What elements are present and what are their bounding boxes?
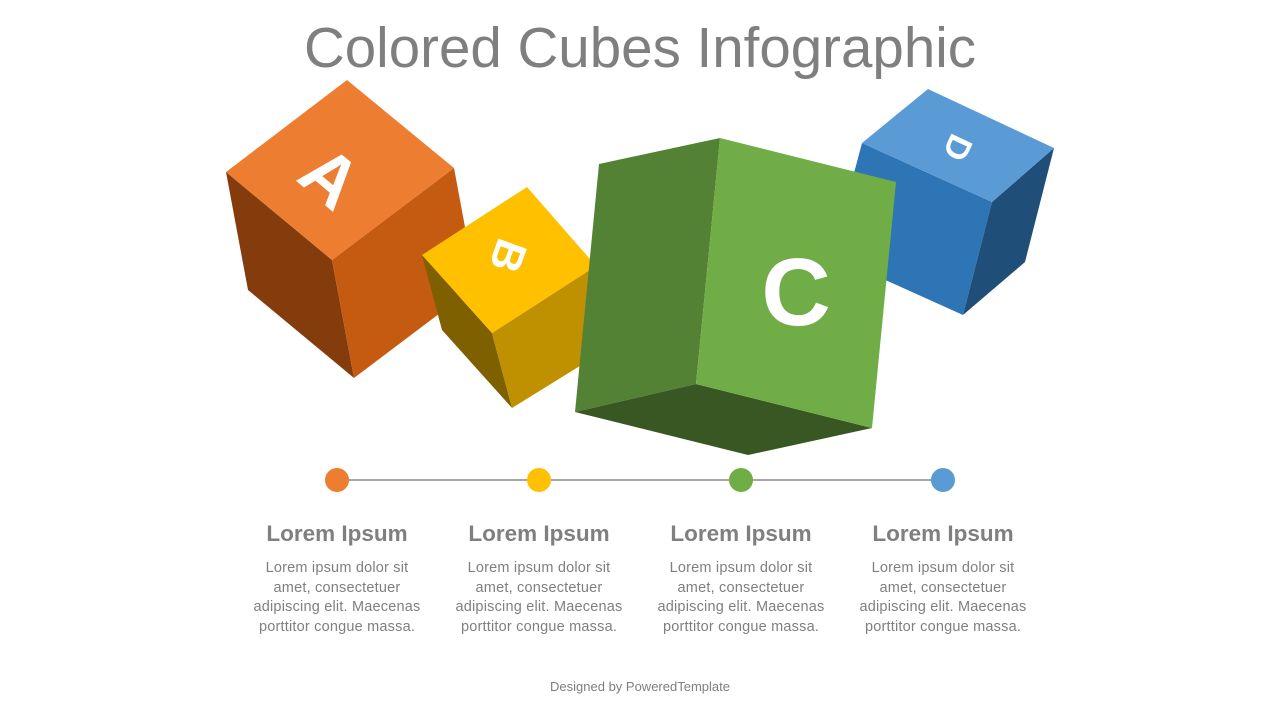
text column 2: porttitor congue massa. [461, 618, 617, 634]
title: Colored Cubes Infographic [304, 16, 976, 79]
text column 4: amet, consectetuer [880, 580, 1006, 596]
text column 4 [859, 521, 1026, 634]
text column 2: Lorem ipsum dolor sit [468, 560, 610, 576]
cube B: B [479, 233, 536, 279]
text column 2: adipiscing elit. Maecenas [455, 599, 622, 615]
text column 2: Lorem Ipsum [468, 521, 610, 546]
text column 2: amet, consectetuer [476, 580, 602, 596]
text column 1: amet, consectetuer [274, 580, 400, 596]
text column 3: porttitor congue massa. [663, 618, 819, 634]
text column 3 [657, 521, 824, 634]
text column 3: adipiscing elit. Maecenas [657, 599, 824, 615]
cube A [226, 80, 476, 378]
text column 1: Lorem Ipsum [266, 521, 408, 546]
cube D [832, 89, 1054, 315]
cube B [422, 187, 617, 408]
text column 1: adipiscing elit. Maecenas [253, 599, 420, 615]
text column 4: adipiscing elit. Maecenas [859, 599, 1026, 615]
timeline [325, 468, 955, 492]
text column 4: Lorem Ipsum [872, 521, 1014, 546]
text column 3: Lorem ipsum dolor sit [670, 560, 812, 576]
text column 4: Lorem ipsum dolor sit [872, 560, 1014, 576]
cube A: A [284, 131, 376, 225]
text column 4: porttitor congue massa. [865, 618, 1021, 634]
cube D: D [935, 128, 980, 167]
text column 3: Lorem Ipsum [670, 521, 812, 546]
text column 1: Lorem ipsum dolor sit [266, 560, 408, 576]
cube C: C [761, 239, 831, 346]
text column 1 [253, 521, 420, 634]
text column 2 [455, 521, 622, 634]
cube C [575, 138, 896, 455]
footer: Designed by PoweredTemplate [550, 679, 730, 694]
text column 1: porttitor congue massa. [259, 618, 415, 634]
text column 3: amet, consectetuer [678, 580, 804, 596]
